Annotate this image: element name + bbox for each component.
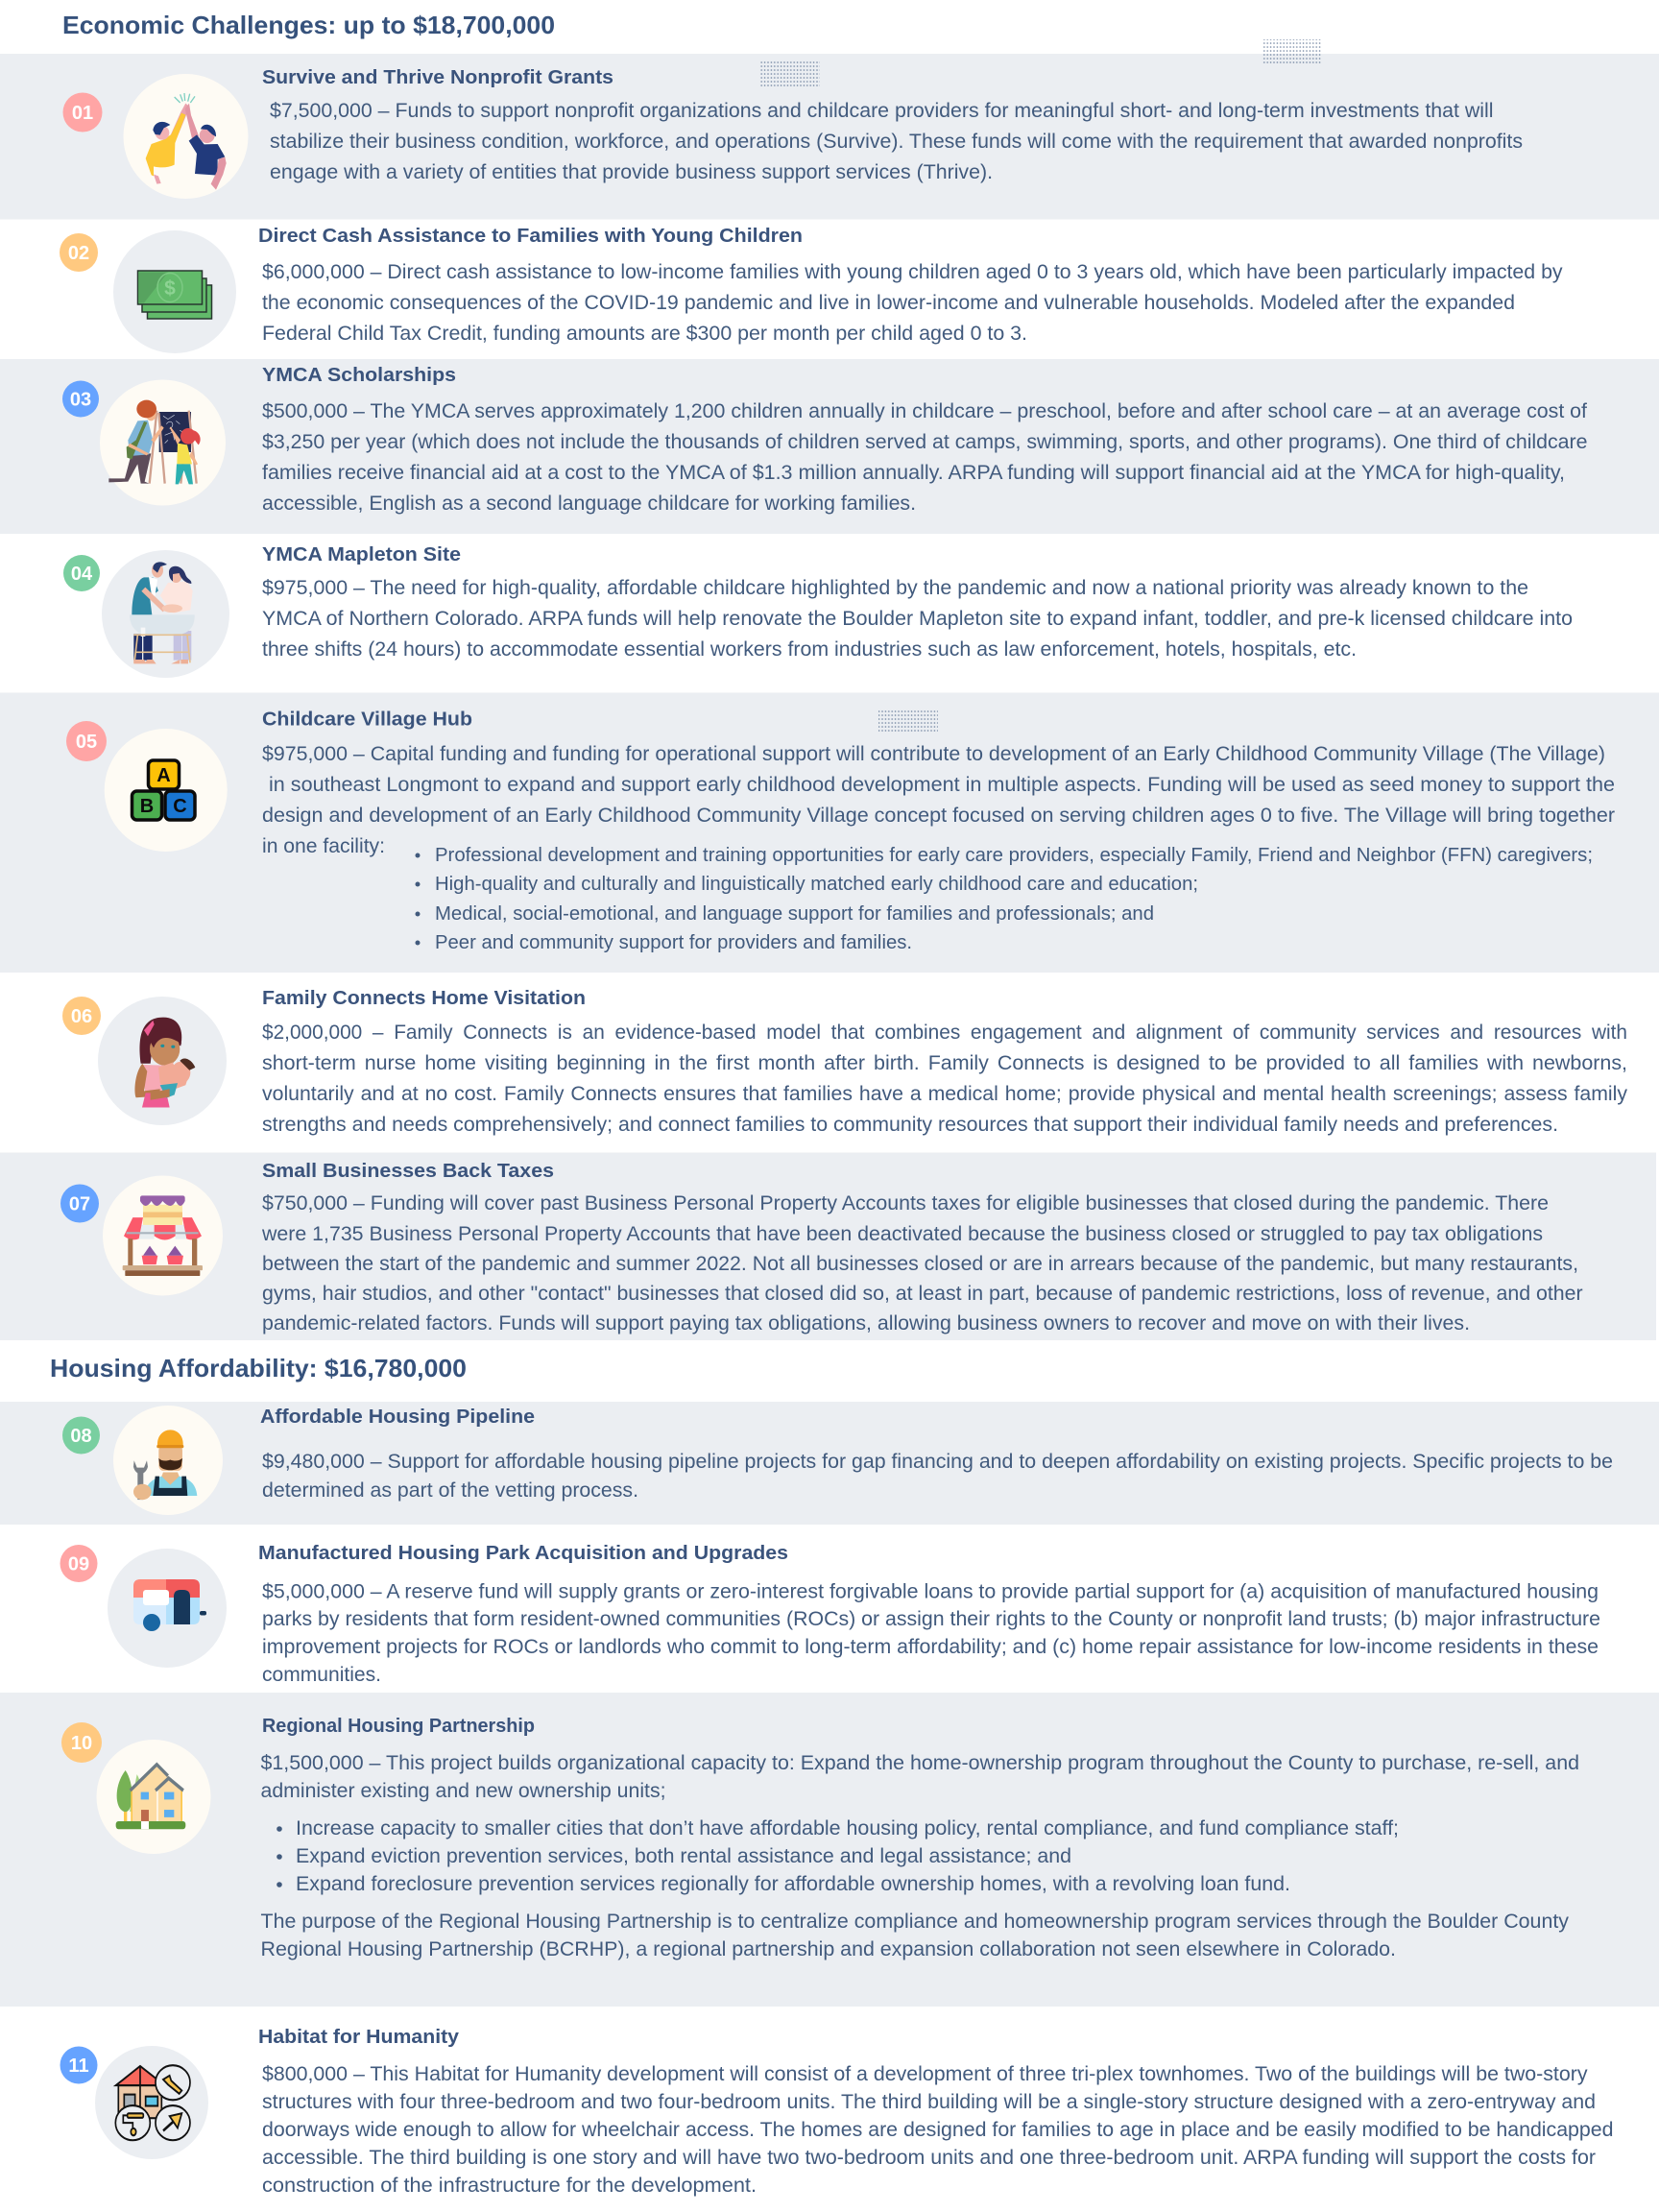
body text: were 1,735 Business Personal Property Accounts that have been deactivated because the business closed or struggled to pay tax obligations xyxy=(261,1223,1543,1245)
number badge 05 xyxy=(66,721,107,761)
body text xyxy=(262,1580,1600,1686)
icon: two people high five xyxy=(123,74,248,199)
bullet list xyxy=(415,845,1593,953)
bullet list: Peer and community support for providers and families. xyxy=(435,932,912,953)
title: Manufactured Housing Park Acquisition and Upgrades xyxy=(258,1543,788,1564)
body text: $975,000 – The need for high-quality, affordable childcare highlighted by the pandemic and now a national priority was already known to the xyxy=(262,577,1528,599)
body text: $5,000,000 – A reserve fund will supply grants or zero-interest forgivable loans to provide partial support for (a) acquisition of manufactured housing xyxy=(262,1580,1599,1603)
number badge 03: 03 xyxy=(70,390,91,411)
number badge 04 xyxy=(63,555,100,591)
icon: teacher and child at blackboard xyxy=(100,380,226,505)
body text: in one facility: xyxy=(262,835,385,857)
bullet list: High-quality and culturally and linguistically matched early childhood care and education; xyxy=(435,874,1198,895)
panel: 05 childcare village hub xyxy=(0,693,1659,973)
title: Affordable Housing Pipeline xyxy=(260,1407,535,1428)
panel: 04 YMCA Mapleton site xyxy=(63,544,1573,678)
body text: $750,000 – Funding will cover past Business Personal Property Accounts taxes for eligible businesses that closed during the pandemic. There xyxy=(262,1192,1549,1214)
body text xyxy=(262,577,1573,661)
body text xyxy=(262,400,1588,515)
title: Direct Cash Assistance to Families with Young Children xyxy=(258,226,803,247)
body text: accessible. The third building is one story and will have two two-bedroom units and one three-bedroom unit. ARPA funding will support the costs for xyxy=(262,2147,1596,2169)
number badge 11 xyxy=(60,2047,98,2083)
body text xyxy=(262,2063,1613,2197)
number badge 05: 05 xyxy=(76,732,97,753)
title: YMCA Scholarships xyxy=(262,365,456,386)
body text xyxy=(262,1022,1627,1136)
icon: stack of cash xyxy=(113,230,236,353)
icon: construction worker xyxy=(113,1406,223,1515)
dotted decoration row five xyxy=(878,709,938,733)
body text: Federal Child Tax Credit, funding amounts are $300 per month per child aged 0 to 3. xyxy=(262,323,1027,345)
title: Habitat for Humanity xyxy=(258,2027,460,2048)
icon: ABC blocks xyxy=(105,729,228,852)
panel: 07 small businesses back taxes xyxy=(0,1152,1656,1340)
closing paragraph xyxy=(261,1911,1569,1960)
body text: the economic consequences of the COVID-19 pandemic and live in lower-income and vulnerable households. Modeled after the expanded xyxy=(262,292,1515,314)
number badge 02: 02 xyxy=(68,243,89,264)
closing paragraph: The purpose of the Regional Housing Partnership is to centralize compliance and homeownership program services through the Boulder County xyxy=(261,1911,1569,1933)
body text: stabilize their business condition, workforce, and operations (Survive). These funds will come with the requirement that awarded nonprofits xyxy=(270,131,1523,153)
panel: 09 manufactured housing xyxy=(60,1543,1600,1686)
body text: families receive financial aid at a cost to the YMCA of $1.3 million annually. ARPA funding will support financial aid at the YMCA for high-quality, xyxy=(262,462,1565,484)
bullet list: Expand foreclosure prevention services regionally for affordable ownership homes, with a revolving loan fund. xyxy=(296,1873,1290,1895)
number badge 03 xyxy=(62,380,99,417)
body text: parks by residents that form resident-owned communities (ROCs) or assign their rights to the County or nonprofit land trusts; (b) major infrastructure xyxy=(262,1608,1600,1630)
icon: house with trees xyxy=(96,1740,211,1854)
icon: camper trailer xyxy=(108,1549,227,1668)
body text xyxy=(261,1752,1579,1802)
number badge 09: 09 xyxy=(68,1553,89,1575)
body text: $6,000,000 – Direct cash assistance to low-income families with young children aged 0 to 3 years old, which have been particularly impacted by xyxy=(262,261,1563,283)
body text: strengths and needs comprehensively; and connect families to community resources that support their individual family needs and preferences. xyxy=(262,1114,1558,1136)
body text: $1,500,000 – This project builds organizational capacity to: Expand the home-ownership program throughout the County to purchase, re-sell, and xyxy=(261,1752,1579,1774)
number badge 06: 06 xyxy=(71,1006,92,1027)
body text: $975,000 – Capital funding and funding for operational support will contribute to development of an Early Childhood Community Village (The Village) xyxy=(262,743,1605,765)
title: Survive and Thrive Nonprofit Grants xyxy=(262,67,613,88)
body text xyxy=(262,261,1563,345)
panel: 01 survive and thrive xyxy=(0,54,1659,219)
closing paragraph: Regional Housing Partnership (BCRHP), a regional partnership and expansion collaboration not seen elsewhere in Colorado. xyxy=(261,1938,1396,1960)
title: YMCA Mapleton Site xyxy=(262,544,461,565)
heading: economic challenges: Economic Challenges: up to $18,700,000 xyxy=(62,11,555,39)
number badge 07: 07 xyxy=(69,1194,90,1215)
body text: short-term nurse home visiting beginning in the first month after birth. Family Connects is designed to be provided to all families with newborns, xyxy=(262,1052,1627,1074)
number badge 07 xyxy=(60,1185,99,1223)
number badge 01 xyxy=(63,92,102,132)
number badge 10: 10 xyxy=(71,1733,92,1754)
number badge 11: 11 xyxy=(68,2056,89,2077)
body text: administer existing and new ownership units; xyxy=(261,1780,666,1802)
body text: in southeast Longmont to expand and support early childhood development in multiple aspects. Funding will be used as seed money to support the xyxy=(269,774,1615,796)
panel: 03 YMCA scholarships xyxy=(0,359,1659,534)
body text: $3,250 per year (which does not include the thousands of children served at camps, swimming, sports, and other programs). One third of childcare xyxy=(262,431,1588,453)
bullet list: Professional development and training opportunities for early care providers, especially Family, Friend and Neighbor (FFN) caregivers; xyxy=(435,845,1593,866)
icon: ABC blocks: B xyxy=(140,796,154,817)
body text xyxy=(261,1192,1583,1334)
number badge 09 xyxy=(60,1545,98,1582)
bullet list: Expand eviction prevention services, both rental assistance and legal assistance; and xyxy=(296,1845,1071,1867)
dotted decoration row one xyxy=(760,61,820,86)
body text xyxy=(262,743,1615,857)
body text: structures with four three-bedroom and two four-bedroom units. The third building will be a single-story structure designed with a zero-entryway and xyxy=(262,2091,1596,2113)
body text: engage with a variety of entities that provide business support services (Thrive). xyxy=(270,161,993,183)
panel: 08 affordable housing pipeline xyxy=(0,1402,1659,1525)
heading: housing affordability: Housing Affordability: $16,780,000 xyxy=(50,1354,467,1382)
body text: design and development of an Early Childhood Community Village concept focused on serving children ages 0 to five. The Village will bring together xyxy=(262,805,1615,827)
title: Regional Housing Partnership xyxy=(262,1716,535,1737)
icon: stack of cash: $ xyxy=(164,277,176,300)
icon: parents bathing baby xyxy=(102,550,229,678)
body text xyxy=(262,1451,1613,1502)
number badge 10 xyxy=(61,1722,102,1763)
body text: communities. xyxy=(262,1664,381,1686)
icon: ABC blocks: A xyxy=(156,765,171,786)
body text: improvement projects for ROCs or landlords who commit to long-term affordability; and (c) home repair assistance for low-income residents in these xyxy=(262,1636,1599,1658)
body text: between the start of the pandemic and summer 2022. Not all businesses closed or are in arrears because of the pandemic, but many restaurants, xyxy=(262,1253,1578,1275)
panel: 10 regional housing partnership xyxy=(0,1693,1659,2007)
body text: three shifts (24 hours) to accommodate essential workers from industries such as law enforcement, hotels, hospitals, etc. xyxy=(262,638,1357,661)
number badge 08 xyxy=(62,1417,100,1454)
body text: pandemic-related factors. Funds will support paying tax obligations, allowing business owners to recover and move on with their lives. xyxy=(262,1312,1470,1334)
number badge 08: 08 xyxy=(70,1426,92,1447)
body text: construction of the infrastructure for the development. xyxy=(262,2175,757,2197)
title: Childcare Village Hub xyxy=(262,709,472,730)
number badge 02 xyxy=(60,233,98,272)
icon: mother holding baby xyxy=(98,997,227,1125)
title: Family Connects Home Visitation xyxy=(262,988,586,1009)
body text: voluntarily and at no cost. Family Connects ensures that families have a medical home; provide physical and mental health screenings; assess family xyxy=(262,1083,1627,1105)
body text: $7,500,000 – Funds to support nonprofit organizations and childcare providers for meaningful short- and long-term investments that will xyxy=(270,100,1494,122)
body text: $800,000 – This Habitat for Humanity development will consist of a development of three tri-plex townhomes. Two of the buildings will be two-story xyxy=(262,2063,1588,2085)
body text xyxy=(270,100,1523,183)
icon: bakery storefront xyxy=(103,1175,223,1296)
body text: $2,000,000 – Family Connects is an evidence-based model that combines engagement and alignment of community services and resources with xyxy=(262,1022,1627,1044)
body text: $9,480,000 – Support for affordable housing pipeline projects for gap financing and to deepen affordability on existing projects. Specific projects to be xyxy=(262,1451,1613,1473)
body text: determined as part of the vetting process. xyxy=(262,1479,638,1502)
body text: doorways wide enough to allow for wheelchair access. The homes are designed for families to age in place and be easily modified to be handicapped xyxy=(262,2119,1613,2141)
body text: gyms, hair studios, and other "contact" businesses that closed did so, at least in part, because of pandemic restrictions, loss of revenue, and other xyxy=(262,1283,1583,1305)
title: Small Businesses Back Taxes xyxy=(262,1161,554,1182)
panel: 06 family connects xyxy=(62,988,1627,1136)
number badge 01: 01 xyxy=(72,103,93,124)
number badge 06 xyxy=(62,997,101,1035)
bullet list xyxy=(276,1817,1399,1895)
icon: house with tools xyxy=(95,2046,208,2159)
body text: YMCA of Northern Colorado. ARPA funds will help renovate the Boulder Mapleton site to expand infant, toddler, and pre-k licensed childcare into xyxy=(262,608,1573,630)
panel: 11 habitat for humanity xyxy=(60,2027,1613,2197)
bullet list: Increase capacity to smaller cities that don’t have affordable housing policy, rental compliance, and fund compliance staff; xyxy=(296,1817,1399,1839)
body text: $500,000 – The YMCA serves approximately 1,200 children annually in childcare – preschool, before and after school care – at an average cost of xyxy=(262,400,1587,422)
icon: ABC blocks: C xyxy=(173,796,187,817)
number badge 04: 04 xyxy=(71,564,93,585)
body text: accessible, English as a second language childcare for working families. xyxy=(262,493,916,515)
dotted decoration top xyxy=(1262,39,1322,63)
bullet list: Medical, social-emotional, and language support for families and professionals; and xyxy=(435,903,1154,925)
panel: 02 direct cash assistance xyxy=(60,226,1563,353)
